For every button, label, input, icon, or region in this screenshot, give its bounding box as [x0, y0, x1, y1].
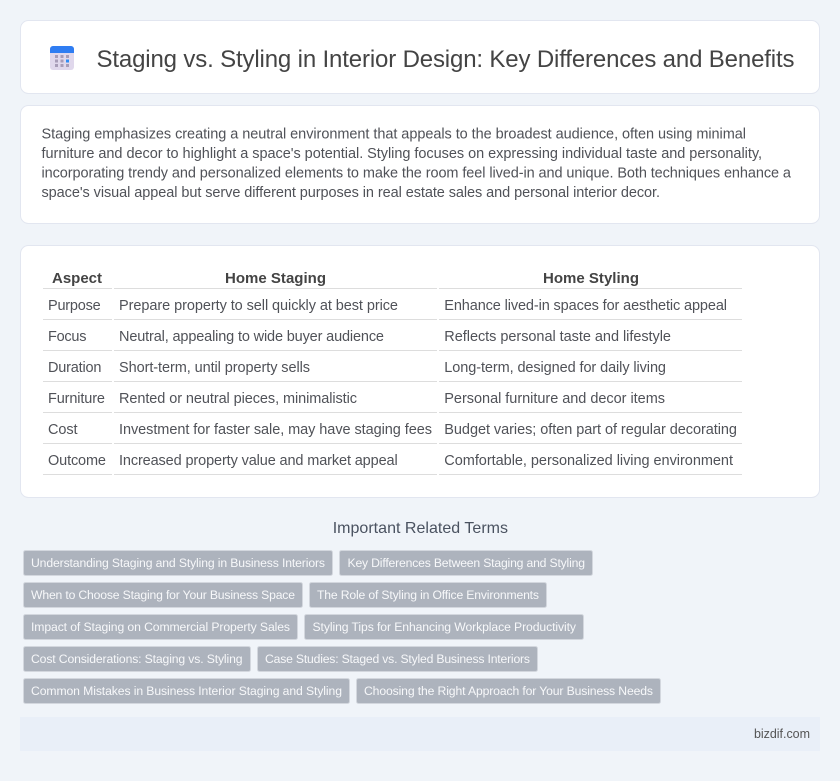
table row: focus: [43, 329, 742, 350]
table header row: Home Styling: [543, 270, 639, 287]
table row: purpose: Purpose: [48, 298, 101, 314]
table header row: Aspect: [52, 270, 102, 287]
table row: cost: Investment for faster sale, may have staging fees: [119, 422, 432, 438]
table row: cost: Budget varies; often part of regular decorating: [444, 422, 737, 438]
table row: duration: Long-term, designed for daily living: [444, 360, 666, 376]
tag list: related terms: Impact of Staging on Commercial Property Sales: [31, 620, 290, 634]
tag list: related terms: Understanding Staging and Styling in Business Interiors: [31, 556, 325, 570]
table row: duration: Duration: [48, 360, 102, 376]
text block: intro: space's visual appeal but serve different purposes in real estate sales and personal interior decor.: [42, 185, 660, 201]
table row: purpose: Prepare property to sell quickly at best price: [119, 298, 398, 314]
tag list: related terms: The Role of Styling in Office Environments: [317, 588, 539, 602]
table row: cost: Cost: [48, 422, 78, 438]
table row: furniture: Furniture: [48, 391, 105, 407]
table row: furniture: Rented or neutral pieces, minimalistic: [119, 391, 357, 407]
table row: outcome: Increased property value and market appeal: [119, 453, 398, 469]
table row: focus: Reflects personal taste and lifestyle: [444, 329, 671, 345]
footer: bizdif.com: [754, 727, 810, 741]
tag list: related terms: Styling Tips for Enhancing Workplace Productivity: [312, 620, 577, 634]
table row: furniture: Personal furniture and decor items: [444, 391, 665, 407]
table row: focus: Neutral, appealing to wide buyer audience: [119, 329, 384, 345]
table row: furniture: [43, 391, 742, 412]
tag list: related terms: When to Choose Staging for Your Business Space: [31, 588, 295, 602]
tag list: related terms: Cost Considerations: Staging vs. Styling: [31, 652, 242, 666]
heading: related terms: Important Related Terms: [333, 520, 508, 537]
tag list: related terms: Common Mistakes in Business Interior Staging and Styling: [31, 684, 342, 698]
tag list: related terms: [24, 550, 660, 704]
table row: duration: [43, 360, 742, 382]
tag list: related terms: Case Studies: Staged vs. Styled Business Interiors: [265, 652, 530, 666]
table row: outcome: [43, 453, 742, 474]
table row: purpose: [43, 298, 742, 320]
title: Staging vs. Styling in Interior Design: Key Differences and Benefits: [96, 46, 794, 73]
panel: comparison table: [20, 246, 820, 498]
text block: intro: furniture and decor to highlight a space's potential. Styling focuses on expressing individual taste and personality,: [42, 146, 762, 162]
table header row: Home Staging: [225, 270, 326, 287]
icon: calendar: [50, 46, 74, 70]
table row: outcome: Comfortable, personalized living environment: [444, 453, 733, 469]
table row: focus: Focus: [48, 329, 86, 345]
text block: intro: incorporating trendy and personalized elements to make the room feel lived-in and unique. Both techniques enhance a: [42, 166, 792, 182]
footer: [20, 717, 820, 751]
text block: intro: [42, 126, 792, 201]
tag list: related terms: Choosing the Right Approach for Your Business Needs: [364, 684, 653, 698]
table row: purpose: Enhance lived-in spaces for aesthetic appeal: [444, 298, 727, 314]
table row: outcome: Outcome: [48, 453, 106, 469]
tag list: related terms: Key Differences Between Staging and Styling: [348, 556, 585, 570]
table row: duration: Short-term, until property sells: [119, 360, 310, 376]
text block: intro: Staging emphasizes creating a neutral environment that appeals to the broadest audience, often using minimal: [42, 126, 746, 142]
panel: header: [20, 20, 820, 94]
panel: intro paragraph: [20, 106, 820, 224]
table row: cost: [43, 422, 742, 444]
table header row: [43, 270, 742, 288]
